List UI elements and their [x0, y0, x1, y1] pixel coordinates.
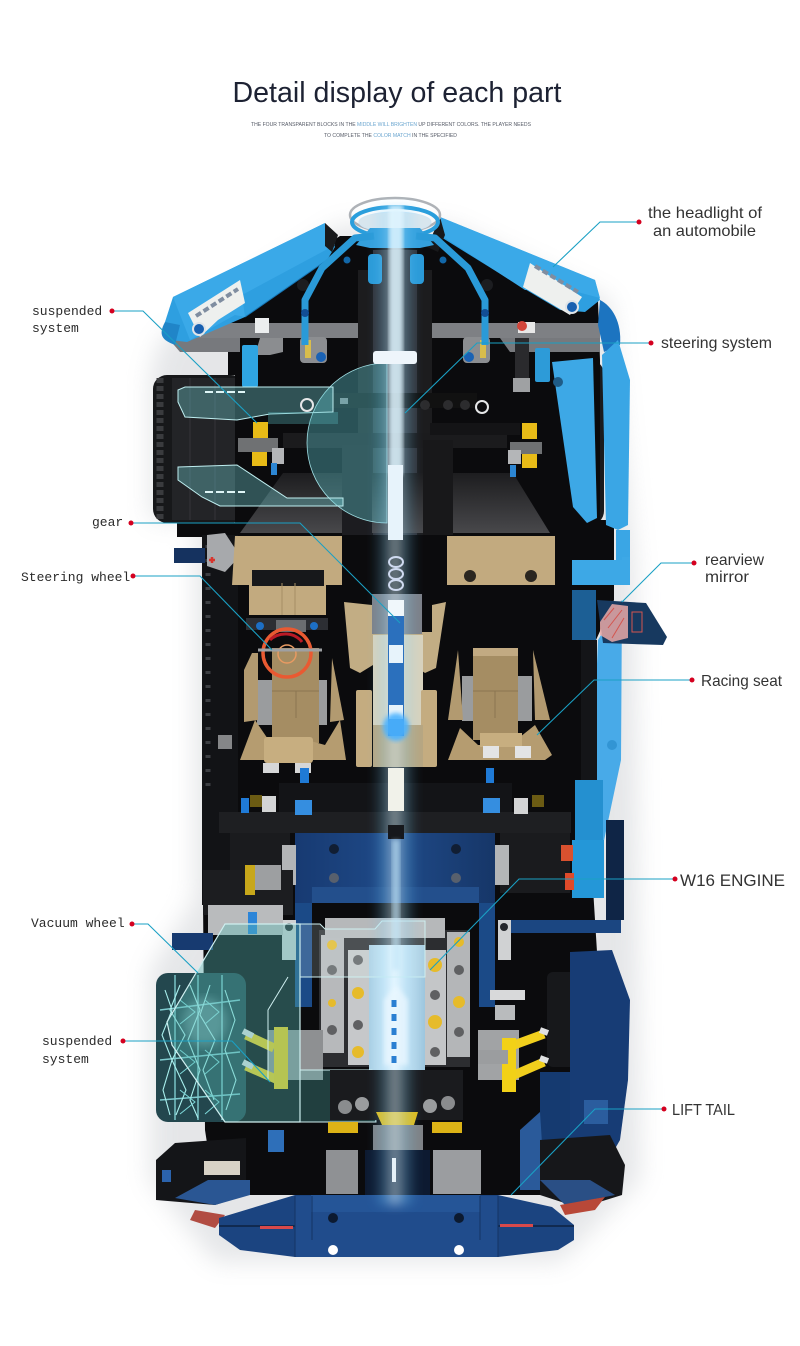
label: gear: gear [92, 515, 123, 530]
label: lift tail [511, 1102, 735, 1195]
label: racing seat: Racing seat [701, 673, 783, 690]
label: W16 engine [430, 871, 785, 970]
subtitle text [251, 122, 532, 139]
central light beam [372, 205, 418, 1205]
chassis [168, 236, 614, 1195]
label: suspended system upper [32, 304, 257, 423]
label: rearview mirror: mirror [705, 569, 750, 586]
title: Detail display of each part [232, 77, 562, 109]
rear corner right [540, 1135, 625, 1215]
label: vacuum wheel [31, 916, 198, 973]
subtitle text: THE FOUR TRANSPARENT BLOCKS IN THE MIDDLE WILL BRIGHTEN UP DIFFERENT COLORS. THE PLAYER NEEDS [251, 122, 532, 128]
subtitle text: TO COMPLETE THE COLOR MATCH IN THE SPECIFIED [324, 133, 457, 139]
door and fender right [535, 340, 630, 850]
car model [150, 198, 667, 1262]
seat right [448, 648, 552, 760]
drivetrain below engine [268, 1070, 481, 1195]
label: suspended system lower: suspended [42, 1034, 112, 1049]
label: steering system: steering system [661, 335, 772, 352]
left side frame [174, 533, 240, 905]
tan top seat blocks [232, 536, 555, 615]
front suspension and grey bar [168, 250, 600, 535]
seat left [240, 648, 346, 773]
soft shadow [150, 225, 640, 1262]
label: rearview mirror: rearview [705, 552, 764, 569]
front ring bumper [350, 198, 440, 248]
lift tail spoiler [219, 1195, 574, 1257]
yellow shock absorbers rear [243, 1027, 548, 1092]
hood left panel [165, 223, 338, 342]
right rear navy cover [520, 950, 630, 1190]
label: lift tail: LIFT TAIL [672, 1102, 735, 1119]
black cross member [219, 768, 571, 893]
label: steering wheel [21, 570, 272, 650]
label: the headlight: the headlight of [648, 205, 763, 222]
label: the headlight: an automobile [653, 223, 756, 240]
steering column linkage [246, 618, 328, 632]
icon: front right tyre [530, 360, 604, 525]
label: rearview mirror [622, 552, 764, 602]
label: W16 engine: W16 ENGINE [680, 871, 785, 890]
rear corner left [156, 1138, 250, 1228]
label: suspended system lower: system [42, 1052, 89, 1067]
glass overlay rear wheel [167, 921, 425, 1122]
mirror with red hologram [597, 600, 667, 645]
label: steering wheel: Steering wheel [21, 570, 130, 585]
rear left tyre [156, 973, 246, 1122]
icon: front left tyre [153, 375, 245, 523]
W16 engine [319, 918, 470, 1070]
label: vacuum wheel: Vacuum wheel [31, 916, 125, 931]
label: suspended system upper: system [32, 321, 79, 336]
label: gear [92, 515, 400, 623]
label: suspended system upper: suspended [32, 304, 102, 319]
centre console [344, 594, 446, 767]
label: suspended system lower [42, 1034, 270, 1082]
steering wheel highlight [258, 629, 322, 677]
glass overlay front suspension [178, 363, 488, 523]
label: steering system [405, 335, 772, 413]
rear frame navy [282, 833, 511, 1007]
label: the headlight [553, 205, 763, 267]
yellow shock absorbers front [238, 422, 542, 477]
hood right panel [162, 217, 620, 352]
blue steering arms [301, 236, 489, 345]
label: racing seat [537, 673, 783, 735]
rear sides [172, 820, 624, 1080]
